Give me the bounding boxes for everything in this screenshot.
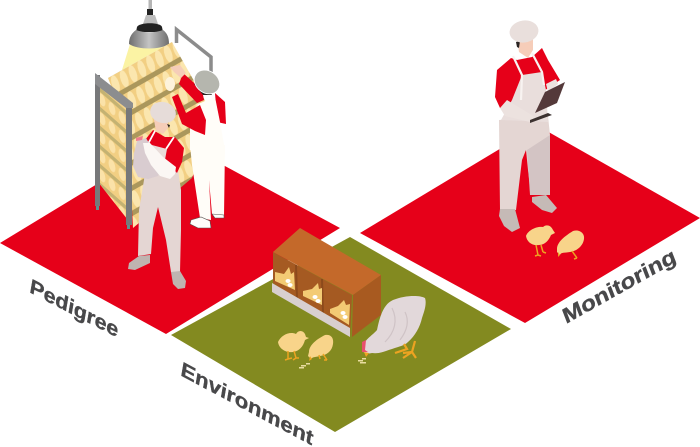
trousers and bib <box>138 148 181 272</box>
icon: chick on green left <box>278 331 309 360</box>
straw 3 <box>330 300 350 325</box>
label: Monitoring: Monitoring <box>560 245 679 329</box>
right side board <box>352 275 381 337</box>
red shirt <box>145 130 184 173</box>
panel: pedigree floor <box>0 138 340 334</box>
seeds <box>299 358 366 368</box>
apron straps <box>513 53 544 100</box>
icon: chick on green right <box>308 335 333 361</box>
cap and hair <box>194 84 212 95</box>
right rack post <box>126 104 132 225</box>
left shoe <box>499 209 520 232</box>
icon: hen <box>362 296 426 358</box>
icon: chick on red right <box>557 230 584 259</box>
left rack post <box>95 75 100 206</box>
trousers <box>499 116 550 210</box>
red back strip <box>215 93 226 124</box>
left shoe <box>128 255 150 270</box>
hen in arms <box>133 138 160 179</box>
straw 2 <box>303 283 322 305</box>
front plank <box>272 283 350 337</box>
red shirt and sleeves <box>495 48 560 110</box>
face <box>153 115 168 134</box>
apron straps <box>148 131 174 149</box>
worker: woman holding hen <box>128 99 186 289</box>
hairnet <box>148 99 178 126</box>
face <box>517 38 533 58</box>
eggs <box>286 279 348 319</box>
apron <box>501 72 548 122</box>
egg rack <box>95 42 215 229</box>
comb of hen <box>136 136 143 141</box>
right shoe <box>171 271 186 289</box>
hair <box>516 41 520 48</box>
forearm <box>500 100 535 122</box>
trousers <box>190 145 225 220</box>
legs <box>395 341 416 358</box>
worker: man loading eggs <box>165 65 226 228</box>
tablet <box>535 82 565 113</box>
lower arm and shoulder <box>172 94 206 135</box>
raised arm <box>179 73 204 103</box>
straw 1 <box>275 267 295 290</box>
rack top rail <box>95 73 133 108</box>
hand and egg <box>170 65 186 78</box>
beak <box>364 352 369 357</box>
compartment dividers <box>296 265 323 313</box>
rack back frame <box>176 30 211 72</box>
icon: chick on red left <box>526 225 555 256</box>
top board <box>273 228 381 295</box>
worker: monitoring person with tablet <box>495 19 565 232</box>
nest box <box>272 228 381 337</box>
apron bib <box>148 144 167 165</box>
egg tray right face <box>108 42 215 228</box>
comb <box>362 340 368 352</box>
label: Environment: Environment <box>179 358 315 447</box>
panel: monitoring floor <box>360 126 700 323</box>
inner back wall <box>273 252 352 337</box>
egg tray left face <box>98 84 131 224</box>
panel: environment floor <box>171 237 511 432</box>
label: Pedigree: Pedigree <box>28 275 120 342</box>
white apron <box>190 97 225 150</box>
shoes <box>190 214 224 228</box>
right shoe <box>532 195 557 213</box>
icon: hanging lamp with light cone <box>122 0 172 70</box>
rack feet <box>96 206 130 229</box>
hairnet <box>508 19 540 44</box>
white sleeve arm <box>143 143 176 179</box>
